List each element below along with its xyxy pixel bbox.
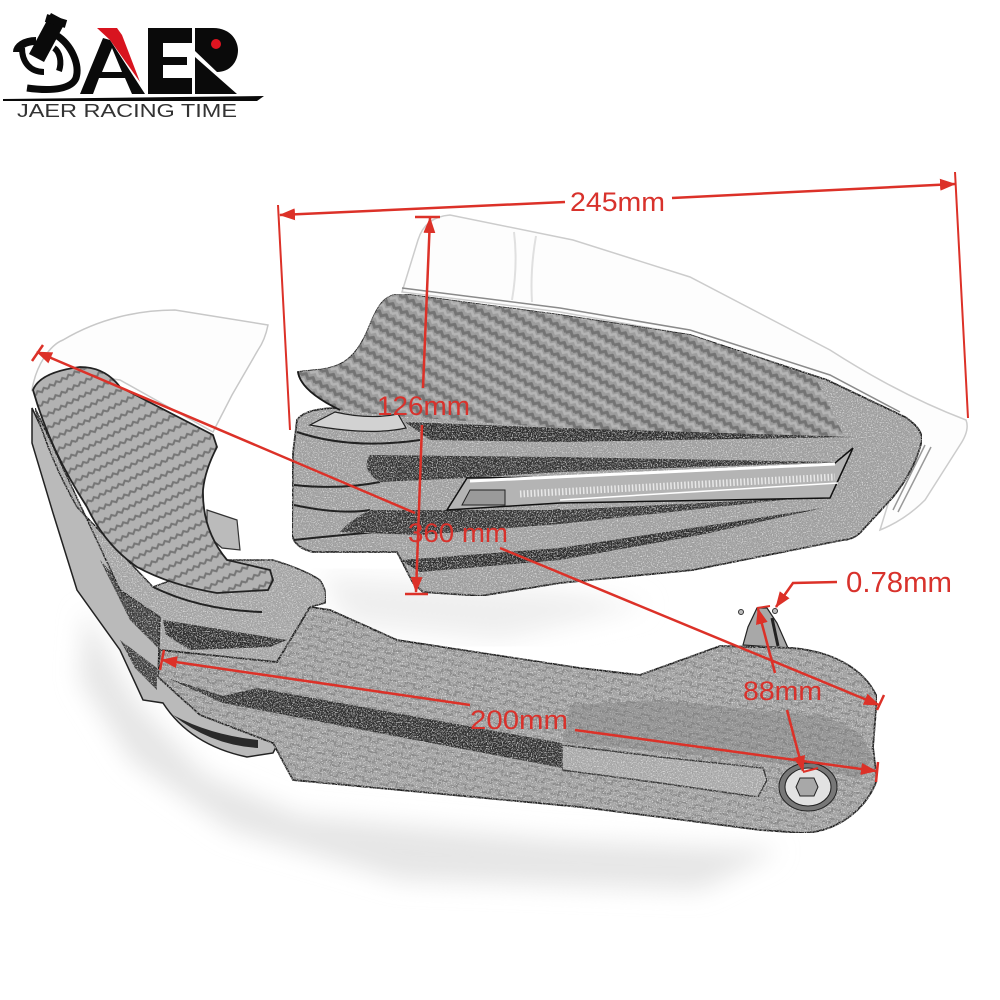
logo red dot <box>211 39 221 49</box>
dimension: 126mm height: 126mm <box>377 391 470 421</box>
dark groove middle <box>367 455 833 482</box>
logo A red accent <box>97 28 140 82</box>
clear wind shield, upper <box>402 215 967 530</box>
dimension: 200mm arm length <box>160 650 878 782</box>
dark groove top <box>405 422 855 442</box>
dark wedge in arm foot <box>173 715 258 748</box>
logo: JAER Racing Time <box>3 13 264 121</box>
dimension: 126mm height <box>377 217 470 594</box>
dark strip beside shell <box>100 560 160 650</box>
lower slot in arm <box>562 745 767 797</box>
dimension: 245mm width <box>278 172 968 430</box>
logo tagline: JAER RACING TIME <box>17 101 237 121</box>
dimension: 88mm bolt to pin <box>743 606 822 772</box>
dark groove under shell <box>163 620 287 650</box>
logo letter R <box>195 28 238 94</box>
dimension: 245mm width: 245mm <box>570 187 665 217</box>
darker weave in arm <box>562 700 873 780</box>
carbon fibre shell, upper <box>298 294 845 438</box>
chrome edge and layered body <box>32 408 300 757</box>
bracket tab <box>207 510 240 550</box>
upper handguard <box>292 215 967 596</box>
dimension: 200mm arm length: 200mm <box>470 705 568 735</box>
carbon shell lower edge <box>298 372 340 410</box>
clamp layer lines <box>294 432 560 540</box>
logo letter E <box>148 28 192 94</box>
shell rim curve <box>153 587 262 612</box>
clear wind shield, lower <box>32 310 268 432</box>
ground shadows <box>80 575 780 890</box>
dimension: 360 mm length <box>32 345 884 710</box>
mount highlight <box>310 412 406 431</box>
guard body silhouette, upper <box>292 294 922 596</box>
logo letter A <box>80 38 145 94</box>
pin and clip <box>738 608 788 648</box>
dimension: 0.78mm callout: 0.78mm <box>846 567 952 599</box>
carbon fibre shell, lower <box>33 367 273 593</box>
logo emblem <box>17 13 77 90</box>
body behind carbon shell <box>35 408 326 677</box>
logo swoosh underline <box>3 96 264 101</box>
lower handguard <box>32 310 877 833</box>
bolt <box>779 763 837 811</box>
dimension: 360 mm length: 360 mm <box>408 518 508 548</box>
dark groove lower <box>340 498 800 535</box>
LED light strip <box>447 448 853 510</box>
dimension: 0.78mm callout <box>776 567 952 607</box>
dark groove bottom <box>400 508 823 572</box>
dark groove in arm <box>167 678 562 768</box>
dimension: 88mm bolt to pin: 88mm <box>743 676 822 706</box>
dark strip low left <box>120 640 157 690</box>
carbon fibre mounting arm <box>158 607 877 833</box>
